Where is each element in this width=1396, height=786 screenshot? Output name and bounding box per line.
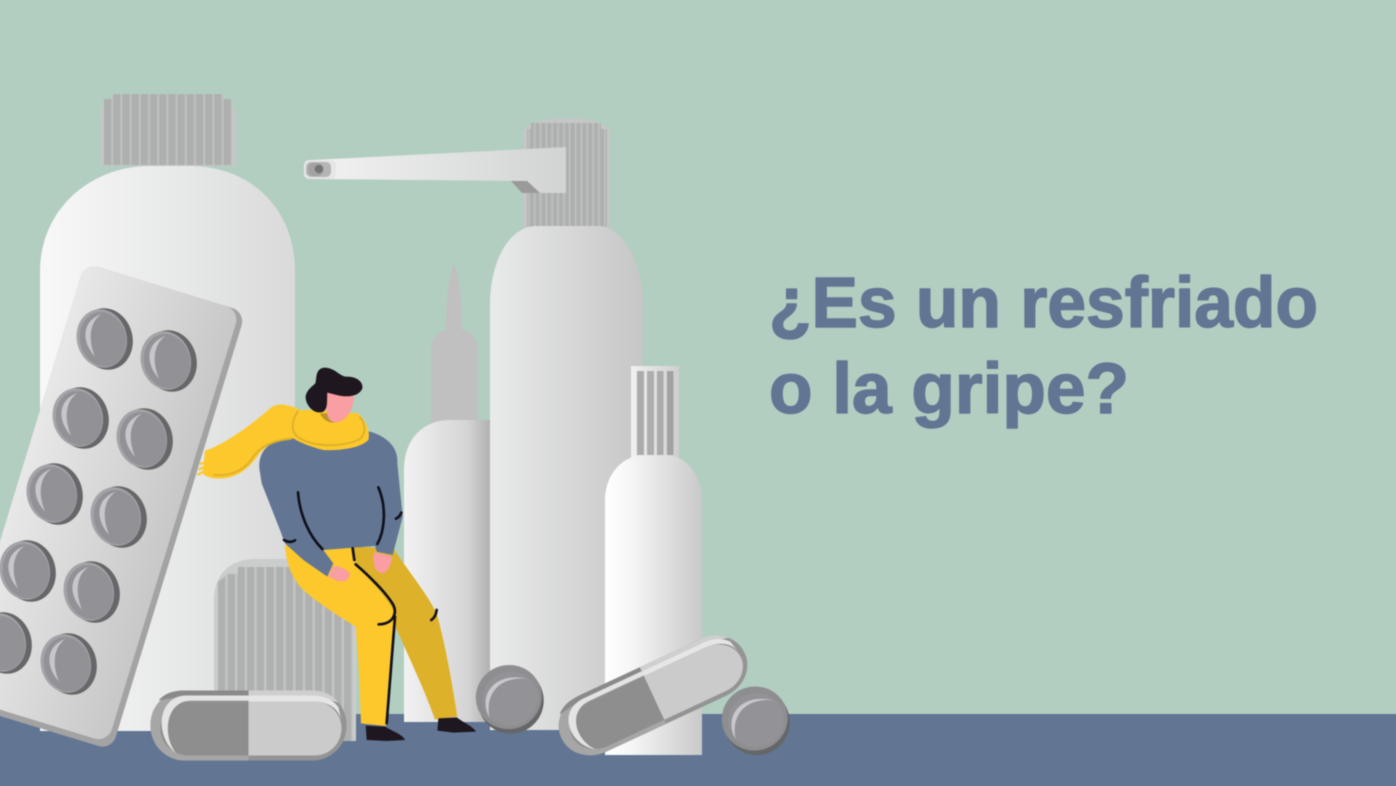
lower bottle cap	[214, 559, 356, 741]
blister pills	[0, 303, 203, 701]
person with scarf	[197, 368, 476, 741]
large bottle body	[40, 166, 295, 731]
floor band	[0, 714, 1396, 786]
capsule: tilted	[548, 625, 758, 766]
spray cap	[523, 118, 610, 227]
face	[326, 392, 354, 422]
spray body	[490, 226, 643, 730]
front shoe	[366, 726, 405, 741]
capsule: horizontal	[150, 690, 346, 760]
back shoe	[437, 717, 476, 733]
scarf	[197, 405, 369, 479]
spray nozzle	[304, 147, 566, 193]
blister pack	[0, 263, 246, 750]
neck shadow	[320, 413, 340, 423]
loose pill: right	[715, 679, 797, 763]
back leg	[353, 547, 457, 719]
right hand	[373, 552, 392, 573]
small bottle	[605, 366, 702, 755]
loose pill: center	[469, 657, 551, 741]
hair	[306, 368, 362, 412]
title	[769, 264, 1318, 429]
spray bottle	[304, 118, 643, 730]
dropper bottle	[404, 263, 495, 722]
title line 2: o la gripe?	[769, 350, 1129, 429]
title line 1: ¿Es un resfriado	[769, 264, 1318, 343]
small bottle body	[605, 455, 702, 755]
clothing lines	[284, 487, 437, 723]
sweater	[259, 432, 403, 577]
large bottle	[40, 94, 295, 731]
left hand	[328, 566, 350, 581]
small bottle cap	[631, 366, 679, 458]
blister plate	[0, 263, 246, 750]
front leg	[285, 545, 396, 726]
large bottle cap	[100, 94, 236, 166]
